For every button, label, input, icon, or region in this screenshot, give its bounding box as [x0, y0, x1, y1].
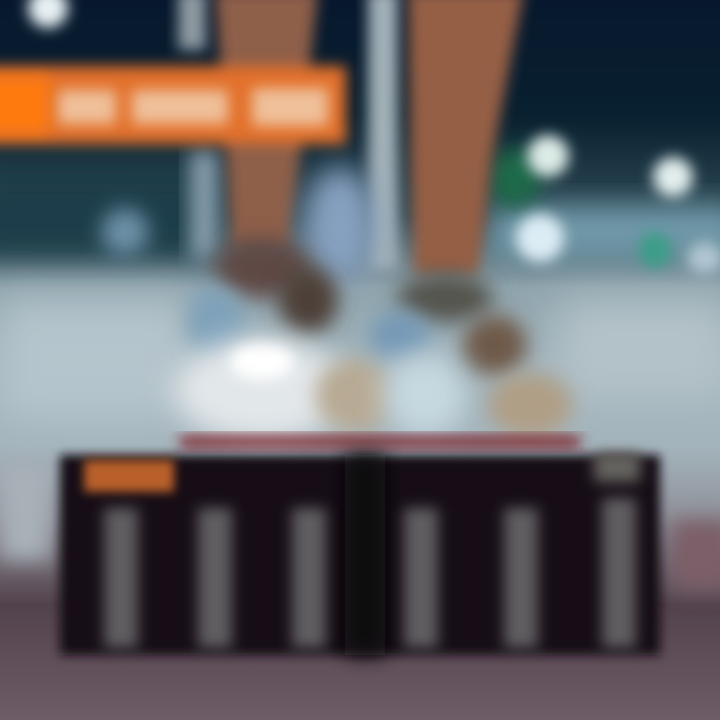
- table header: orange cell: [84, 460, 174, 492]
- shoes: [174, 167, 572, 442]
- table columns, text illegible in reference: [104, 498, 636, 648]
- banner text, illegible in reference: [58, 88, 328, 126]
- table header: grey cell: [594, 452, 640, 482]
- background lights and foliage: [28, 0, 720, 274]
- orange banner: [0, 66, 346, 144]
- dark data table: [60, 436, 660, 655]
- legs and pole: [178, 0, 524, 275]
